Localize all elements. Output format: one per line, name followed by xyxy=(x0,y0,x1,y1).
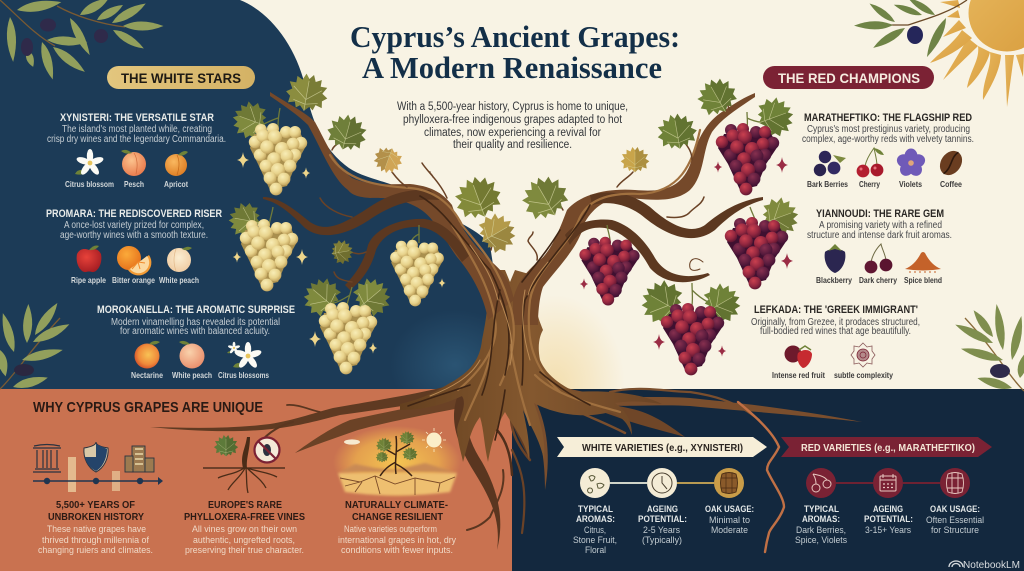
variety: morokanella: Nectarine xyxy=(131,370,163,380)
icon: aromas red xyxy=(806,468,836,498)
column: aromas red: Dark Berries, xyxy=(796,525,846,535)
variety: xynisteri: Apricot xyxy=(164,179,188,189)
icon: climate-resilient tree xyxy=(333,426,461,498)
variety: morokanella: Citrus blossoms xyxy=(218,370,269,380)
intro paragraph: With a 5,500-year history, Cyprus is home to unique, xyxy=(397,101,628,113)
title xyxy=(350,20,680,85)
block: climate resilient: CHANGE RESILIENT xyxy=(352,512,443,523)
intro paragraph: their quality and resilience. xyxy=(453,139,572,151)
roots: thin left and right xyxy=(260,389,759,533)
variety: xynisteri: The island's most planted while, creating xyxy=(62,124,212,135)
panel: the white stars xyxy=(46,66,295,380)
column: oak red: for Structure xyxy=(931,525,979,535)
column: aromas red xyxy=(795,504,847,545)
icon: aromas white xyxy=(580,468,610,498)
variety: maratheftiko: complex, age-worthy reds with velvety tannins. xyxy=(802,134,974,145)
variety: promara: PROMARA: THE REDISCOVERED RISER xyxy=(46,208,222,220)
column: ageing white xyxy=(638,504,687,545)
trunk body xyxy=(400,270,662,462)
variety: morokanella xyxy=(97,304,295,380)
block: phylloxera-free: PHYLLOXERA-FREE VINES xyxy=(184,512,305,523)
intro paragraph: phylloxera-free indigenous grapes adapted to hot xyxy=(403,114,623,126)
vine leaves xyxy=(226,71,804,331)
variety: lefkada xyxy=(751,304,920,380)
left middle branch xyxy=(263,190,440,235)
panel: the red champions xyxy=(751,66,974,380)
variety: yiannoudi xyxy=(807,208,952,285)
variety: lefkada: subtle complexity xyxy=(834,370,893,380)
column: ageing white: 2-5 Years xyxy=(643,525,680,535)
variety: promara: A once-lost variety prized for complex, xyxy=(64,220,204,231)
variety: yiannoudi: YIANNOUDI: THE RARE GEM xyxy=(816,208,944,220)
block: phylloxera-free xyxy=(184,500,305,556)
column: oak red: Often Essential xyxy=(926,515,984,525)
variety: lefkada: Originally, from Grezee, it prodaces structured, xyxy=(751,317,920,328)
block: climate resilient xyxy=(338,500,456,556)
column: ageing red: POTENTIAL: xyxy=(864,514,913,524)
intro paragraph: climates, now experiencing a revival for xyxy=(424,127,601,139)
connector: white to gold xyxy=(677,482,714,484)
olive branch: top right xyxy=(854,0,967,59)
connector: white xyxy=(610,482,647,484)
title: A Modern Renaissance xyxy=(362,51,662,85)
right middle branch xyxy=(590,193,763,238)
column: oak white: Moderate xyxy=(711,525,748,535)
variety: xynisteri: crisp dry wines and the legendary Commandaria. xyxy=(47,134,226,145)
vine tree xyxy=(150,71,862,552)
column: ageing white: POTENTIAL: xyxy=(638,514,687,524)
olive branch: bottom left xyxy=(0,300,71,391)
column: oak red: OAK USAGE: xyxy=(930,504,980,514)
variety: yiannoudi: A promising variety with a refined xyxy=(819,220,942,231)
background: navy left panel xyxy=(0,0,512,390)
icon: own-rooted vine, no phylloxera xyxy=(203,435,285,493)
block: history: These native grapes have xyxy=(47,524,146,535)
block: climate resilient: Native varieties outperform xyxy=(344,524,437,535)
variety: maratheftiko: Coffee xyxy=(940,179,962,189)
block: climate resilient: international grapes in hot, dry xyxy=(338,535,456,546)
connector: red xyxy=(836,482,940,484)
heading pill: the red champions: THE RED CHAMPIONS xyxy=(778,71,920,86)
variety: morokanella: White peach xyxy=(172,370,212,380)
block: history: 5,500+ YEARS OF xyxy=(56,500,135,511)
variety: lefkada: full-bodied red wines that age beautifully. xyxy=(760,326,911,337)
variety: yiannoudi: Blackberry xyxy=(816,275,852,285)
variety: yiannoudi: Spice blend xyxy=(904,275,942,285)
heading pill: the white stars xyxy=(107,66,255,89)
column: aromas white: Citrus, xyxy=(584,525,606,535)
banner: white varieties xyxy=(557,437,767,457)
column: oak white: Minimal to xyxy=(709,515,750,525)
variety: yiannoudi: structure and intense dark fruit aromas. xyxy=(807,230,952,241)
block: history: thrived through millennia of xyxy=(42,535,149,546)
variety: morokanella: Modern vinamelling has revealed its potential xyxy=(111,317,280,328)
olive branch: bottom right xyxy=(953,303,1024,392)
column: ageing white: AGEING xyxy=(647,504,678,514)
column: aromas red: AROMAS: xyxy=(802,514,840,524)
block: history: changing ruiers and climates. xyxy=(38,545,153,556)
variety: xynisteri xyxy=(47,112,226,189)
panel: white varieties xyxy=(557,437,767,555)
variety: maratheftiko: MARATHEFTIKO: THE FLAGSHIP RED xyxy=(804,112,972,124)
variety: promara: age-worthy wines with a smooth texture. xyxy=(60,230,208,241)
variety: maratheftiko: Cherry xyxy=(859,179,880,189)
NotebookLM watermark: NotebookLM xyxy=(963,559,1020,571)
banner: red varieties xyxy=(781,437,992,457)
icon: barrel gold xyxy=(714,468,744,498)
left main branch xyxy=(270,92,514,320)
block: history xyxy=(38,500,153,556)
panel: red varieties xyxy=(781,437,992,545)
column: aromas red: Spice, Violets xyxy=(795,535,847,545)
icon: barrel red xyxy=(940,468,970,498)
column: oak red xyxy=(926,504,984,535)
variety: morokanella: for aromatic wines with balanced acluity. xyxy=(120,326,270,337)
block: history: UNBROKEN HISTORY xyxy=(48,512,144,523)
variety: maratheftiko: Violets xyxy=(899,179,922,189)
column: aromas red: TYPICAL xyxy=(804,504,839,514)
icon: history timeline xyxy=(33,442,163,492)
red sparkles xyxy=(580,157,793,357)
intro paragraph xyxy=(397,101,628,151)
variety: lefkada: LEFKADA: THE 'GREEK IMMIGRANT' xyxy=(754,304,918,316)
variety: maratheftiko: Bark Berries xyxy=(807,179,848,189)
sun: top right xyxy=(930,0,1024,107)
roots: tapered bands xyxy=(150,372,862,550)
variety: xynisteri: XYNISTERI: THE VERSATILE STAR xyxy=(60,112,214,124)
title: Cyprus’s Ancient Grapes: xyxy=(350,20,680,54)
variety: morokanella: MOROKANELLA: THE AROMATIC SURPRISE xyxy=(97,304,295,316)
column: aromas white xyxy=(573,504,617,555)
background: warm glow xyxy=(485,295,625,475)
variety: xynisteri: Citrus blossom xyxy=(65,179,114,189)
background: blue glow xyxy=(390,310,520,420)
twigs and stems xyxy=(320,103,730,282)
banner: red varieties: RED VARIETIES (e.g., MARATHEFTIKO) xyxy=(801,443,975,454)
right main branch xyxy=(513,93,755,325)
left lower branch xyxy=(345,219,470,290)
block: phylloxera-free: EUROPE'S RARE xyxy=(208,500,282,511)
block: climate resilient: conditions with fewer inputs. xyxy=(341,545,453,556)
right lower branch xyxy=(565,220,710,282)
variety: maratheftiko: Cyprus's most prestiginus variety, producing xyxy=(807,124,970,135)
variety: yiannoudi: Dark cherry xyxy=(859,275,897,285)
column: aromas white: TYPICAL xyxy=(578,504,613,514)
olive branch: top left xyxy=(0,0,164,81)
column: aromas white: Stone Fruit, xyxy=(573,535,617,545)
banner: white varieties: WHITE VARIETIES (e.g., XYNISTERI) xyxy=(582,443,743,454)
column: aromas white: AROMAS: xyxy=(576,514,615,524)
white grape clusters xyxy=(240,123,444,374)
heading pill: the red champions xyxy=(763,66,934,89)
variety: promara: Bitter orange xyxy=(112,275,155,285)
divider crack xyxy=(738,402,784,552)
block: phylloxera-free: All vines grow on their own xyxy=(192,524,297,535)
column: oak white xyxy=(705,504,754,535)
panel: comparison background xyxy=(512,389,1024,571)
variety: lefkada: Intense red fruit xyxy=(772,370,825,380)
variety: maratheftiko xyxy=(802,112,974,189)
variety: promara: White peach xyxy=(159,275,199,285)
variety: promara: Ripe apple xyxy=(71,275,106,285)
heading: why unique: WHY CYPRUS GRAPES ARE UNIQUE xyxy=(33,400,263,416)
column: aromas white: Floral xyxy=(585,545,606,555)
block: phylloxera-free: preserving their true character. xyxy=(185,545,304,556)
block: climate resilient: NATURALLY CLIMATE- xyxy=(345,500,448,511)
column: oak white: OAK USAGE: xyxy=(705,504,754,514)
column: ageing red: 3-15+ Years xyxy=(865,525,911,535)
panel: why unique background xyxy=(0,389,512,571)
column: ageing red xyxy=(864,504,913,535)
variety: promara xyxy=(46,208,222,285)
heading pill: the white stars: THE WHITE STARS xyxy=(121,71,241,86)
column: ageing white: (Typically) xyxy=(642,535,682,545)
red grape clusters xyxy=(579,123,788,375)
icon: clock xyxy=(647,468,677,498)
column: ageing red: AGEING xyxy=(873,504,903,514)
panel: why cyprus grapes are unique xyxy=(33,400,461,556)
bark streaks xyxy=(330,130,700,440)
icon: calendar xyxy=(873,468,903,498)
variety: xynisteri: Pesch xyxy=(124,179,144,189)
block: phylloxera-free: authentic, ungrefted roots, xyxy=(193,535,295,546)
gold sparkles xyxy=(233,152,446,354)
